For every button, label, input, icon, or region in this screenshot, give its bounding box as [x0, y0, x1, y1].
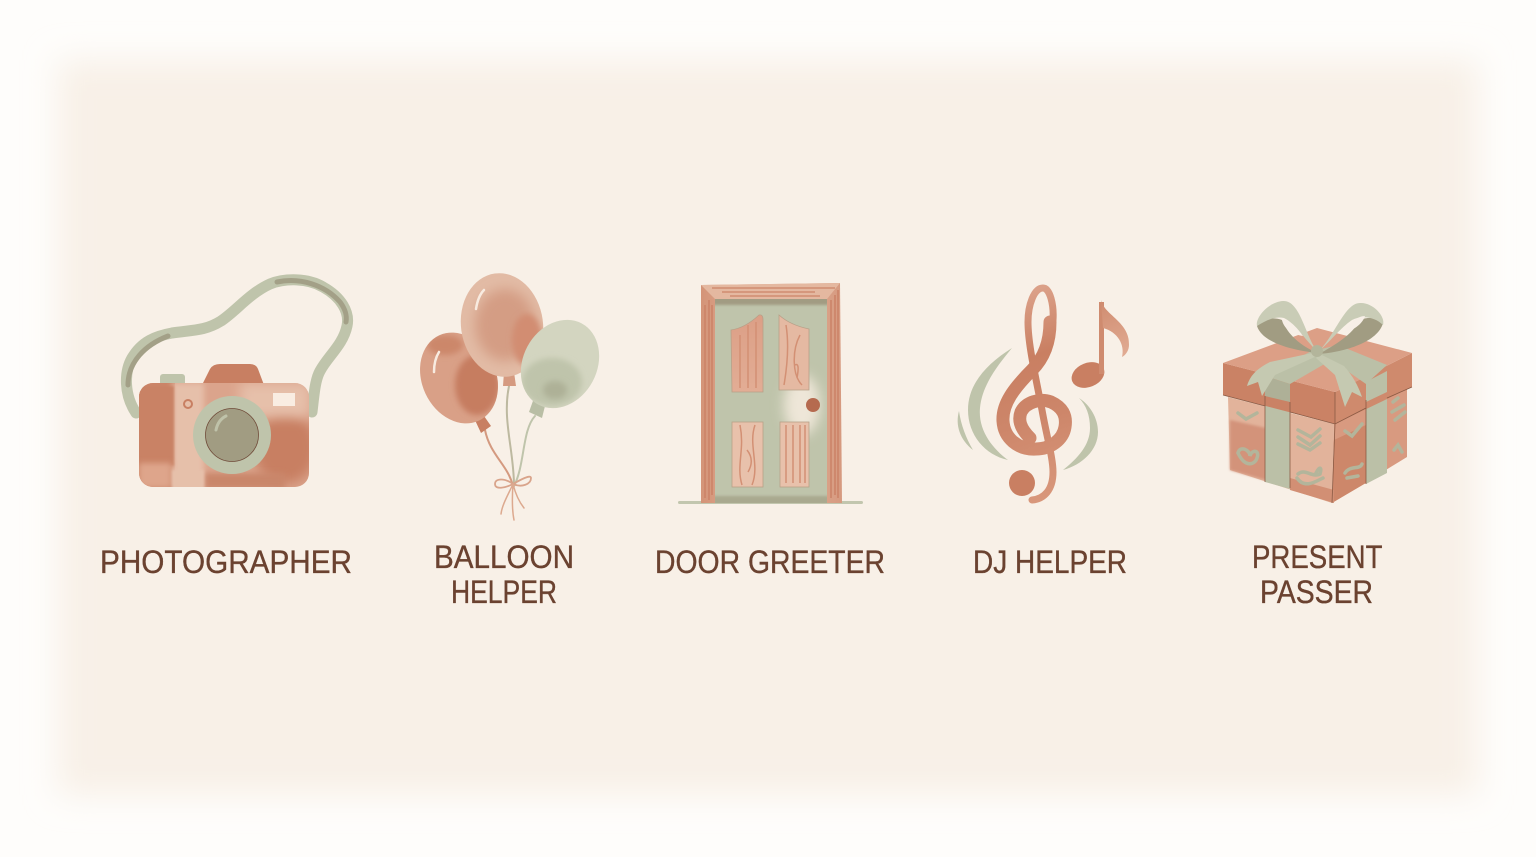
ribbon tails: [1247, 352, 1317, 396]
viewfinder: [273, 393, 295, 406]
wood grain: [740, 322, 805, 485]
box right face: [1332, 388, 1407, 503]
right balloon: [520, 320, 600, 418]
item: present passer: [1223, 301, 1412, 610]
lid side faces: [1223, 363, 1335, 424]
item: door greeter: [655, 283, 885, 580]
camera top hump: [202, 364, 264, 385]
icon: gift box: [1223, 301, 1412, 503]
item: balloon helper: [420, 273, 600, 604]
treble clef: [1003, 288, 1065, 500]
label: door greeter: DOOR GREETER: [655, 544, 885, 580]
sound waves: [958, 348, 1098, 470]
door panels: [731, 315, 809, 487]
top balloon: [460, 273, 544, 386]
lens: [193, 396, 271, 474]
bow knot: [1311, 345, 1323, 357]
ribbon on lid: [1265, 376, 1290, 402]
item: dj helper: [958, 288, 1129, 580]
camera strap: [126, 280, 348, 413]
ground shadow: [678, 501, 863, 504]
label: balloon helper: HELPER: [451, 574, 557, 610]
camera body: [139, 383, 309, 487]
balloon strings: [485, 386, 535, 520]
clef ball: [1009, 470, 1035, 496]
icon: door: [678, 283, 863, 505]
door frame: [701, 283, 842, 503]
label: present passer: PRESENT: [1252, 539, 1382, 575]
label: balloon helper: BALLOON: [434, 539, 574, 575]
item: photographer: [100, 280, 352, 580]
eighth note: [1068, 300, 1129, 392]
small dial: [184, 400, 192, 408]
icon: music notes: [958, 288, 1129, 500]
label: photographer: PHOTOGRAPHER: [100, 544, 352, 580]
camera button: [160, 374, 185, 386]
door leaf: [715, 299, 827, 503]
icon: camera: [126, 280, 348, 490]
icon: balloons: [420, 273, 600, 521]
label: present passer: PASSER: [1260, 574, 1373, 610]
door knob: [806, 398, 820, 412]
label: dj helper: DJ HELPER: [973, 544, 1127, 580]
box left face: [1228, 397, 1334, 503]
bow: [1257, 301, 1383, 357]
left balloon: [420, 332, 498, 433]
box edges: [1223, 387, 1412, 503]
gift patterns: [1238, 398, 1405, 484]
lid top: [1223, 328, 1412, 392]
box ribbons: [1265, 393, 1290, 489]
